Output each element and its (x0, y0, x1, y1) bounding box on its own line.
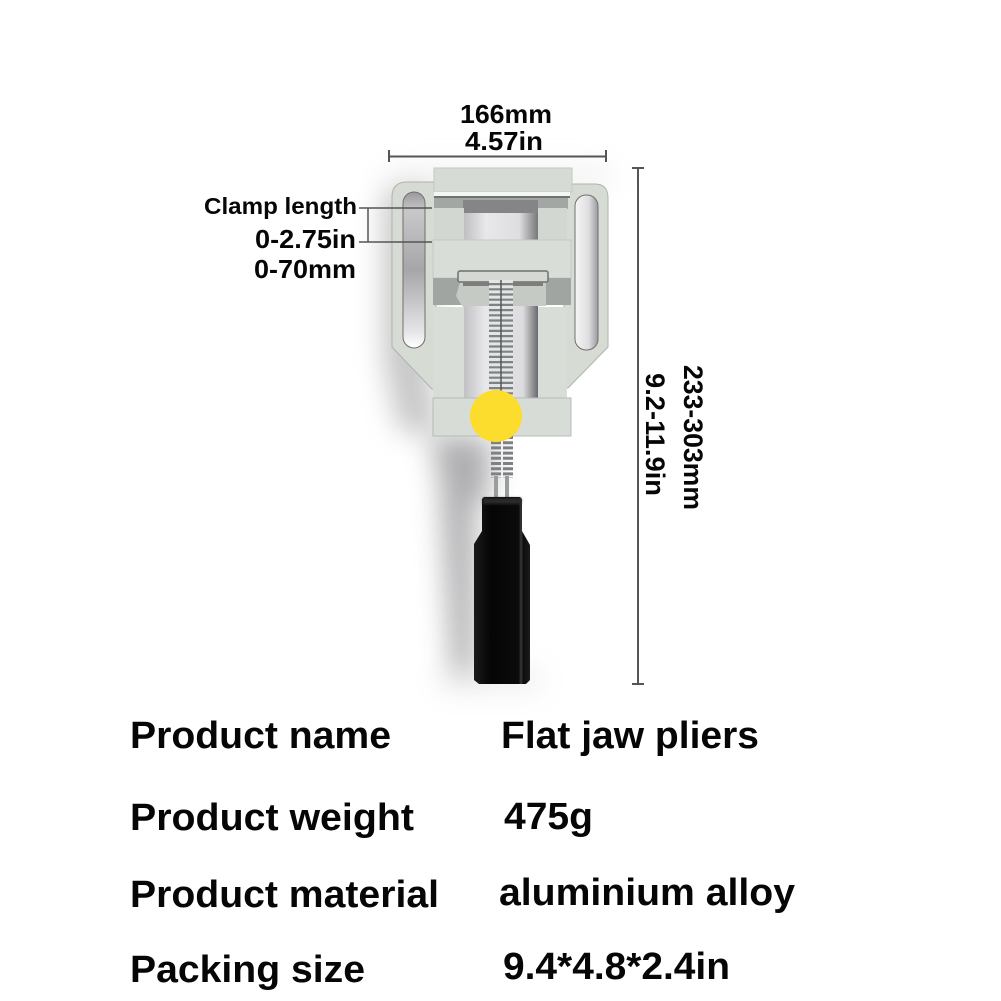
width labels: 4.57in (465, 126, 543, 156)
spec row: product weight (130, 796, 593, 839)
spec table (130, 715, 795, 991)
width dimension line (389, 150, 606, 162)
shadow band under fixed jaw (434, 198, 568, 209)
height dimension line (632, 168, 644, 684)
spec row: packing size: 9.4*4.8*2.4in (503, 946, 730, 988)
spec row: packing size: Packing size (130, 949, 365, 991)
right slot (575, 195, 598, 350)
flat jaw pliers product photo (392, 168, 608, 684)
right rail (538, 307, 567, 400)
spec row: product name: Flat jaw pliers (501, 715, 759, 757)
upper window (463, 213, 538, 241)
spec row: product material (130, 872, 795, 916)
spec row: product weight: 475g (504, 796, 593, 838)
nut slot (456, 282, 546, 306)
spec row: product name: Product name (130, 715, 391, 757)
upper spring and screw (489, 280, 513, 400)
right guide block (538, 208, 567, 241)
soft shadow behind tool (384, 165, 610, 688)
clamp length bracket (359, 208, 432, 242)
lower window (463, 305, 538, 400)
fixed jaw (434, 168, 572, 192)
moving jaw shaded underside (433, 278, 571, 305)
black handle (474, 497, 530, 684)
lower spring and screw (494, 436, 509, 498)
spec row: product material: Product material (130, 874, 439, 916)
spec row: product weight: Product weight (130, 797, 414, 839)
spec row: packing size (130, 946, 730, 991)
spec row: product name (130, 715, 759, 757)
clamp length labels: Clamp length (204, 193, 357, 219)
clamp length labels (204, 193, 357, 284)
clamp length labels: 0-70mm (254, 254, 356, 284)
height label inches: 9.2-11.9in (640, 373, 670, 496)
yellow knob (470, 390, 522, 442)
clamp length labels: 0-2.75in (255, 224, 356, 254)
left rail (433, 307, 464, 400)
moving jaw (433, 240, 571, 278)
width labels: 166mm (460, 99, 552, 129)
mounting plate (392, 182, 608, 389)
width labels (460, 99, 552, 156)
left guide block (434, 208, 464, 241)
left slot (403, 192, 425, 348)
height label mm: 233-303mm (678, 365, 708, 510)
end block (433, 398, 571, 436)
spec row: product material: aluminium alloy (499, 872, 795, 914)
